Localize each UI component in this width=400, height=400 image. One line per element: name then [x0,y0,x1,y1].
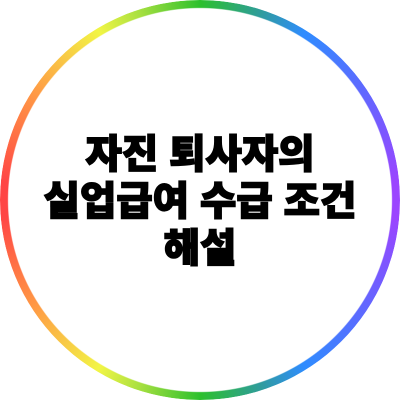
title [44,133,356,271]
title: 자진 퇴사자의 [85,133,314,177]
title: 실업급여 수급 조건 [44,180,356,224]
title: 해설 [164,227,236,271]
